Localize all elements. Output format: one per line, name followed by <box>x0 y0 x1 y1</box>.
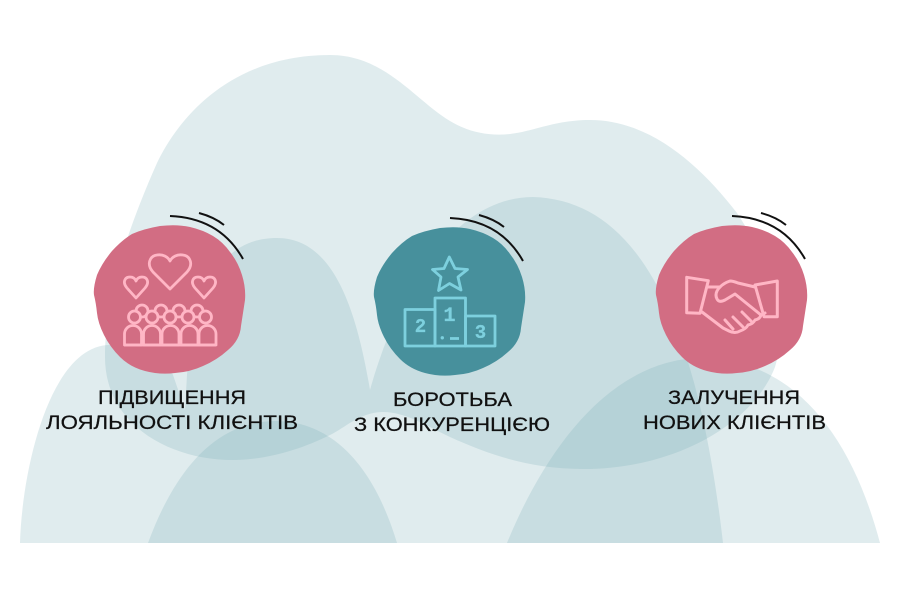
motion arcs <box>450 215 523 261</box>
teal circle <box>374 227 525 376</box>
panel: new customers <box>643 213 826 434</box>
hills silhouette <box>20 197 723 543</box>
label: new customers <box>643 387 826 434</box>
icon: handshake <box>687 277 777 332</box>
background blobs <box>20 55 880 543</box>
icon: podium with star: 2 <box>415 316 426 338</box>
icon: podium with star: 3 <box>475 322 486 344</box>
right dome <box>507 358 880 543</box>
label: loyalty <box>46 387 298 434</box>
label: loyalty: ЛОЯЛЬНОСТІ КЛІЄНТІВ <box>46 412 298 434</box>
pink circle <box>94 225 245 374</box>
icon: hearts and crowd <box>124 255 216 345</box>
icon: podium with star: 1 <box>443 305 456 328</box>
label: new customers: ЗАЛУЧЕННЯ <box>668 387 800 409</box>
label: new customers: НОВИХ КЛІЄНТІВ <box>643 412 826 434</box>
label: competition <box>354 389 550 436</box>
motion arcs <box>170 213 243 259</box>
icon: podium with star <box>405 257 495 346</box>
panel: competition <box>354 215 550 436</box>
big blob <box>105 55 780 469</box>
label: loyalty: ПІДВИЩЕННЯ <box>98 387 246 409</box>
label: competition: З КОНКУРЕНЦІЄЮ <box>354 414 550 436</box>
panel: customer loyalty <box>46 213 298 434</box>
label: competition: БОРОТЬБА <box>393 389 512 411</box>
left dome <box>148 421 397 543</box>
pink circle <box>656 225 807 374</box>
motion arcs <box>732 213 805 259</box>
